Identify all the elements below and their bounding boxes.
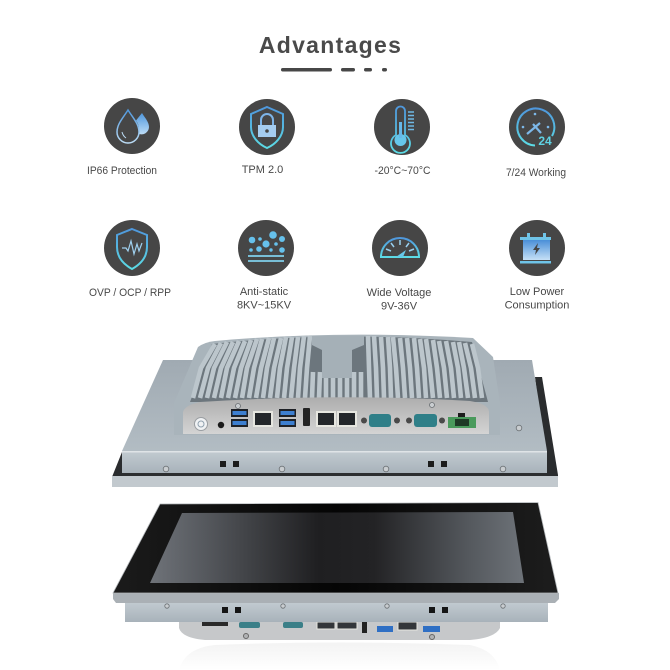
underside ports [202,622,440,640]
power terminal [448,413,476,428]
heatsink gaps [190,336,488,402]
serial ports [361,414,445,427]
icon: protection shield waveform [104,220,160,276]
side wall [122,451,547,473]
label: Wide Voltage: Wide Voltage [367,287,431,299]
power button [194,418,208,430]
heatsink fins [193,336,482,398]
audio jack [218,422,224,428]
label: Wide Voltage: 9V-36V [381,300,418,312]
product photo: rear view [112,335,558,487]
title underline [281,68,387,72]
heatsink centre plate [312,336,364,378]
icon: 24 hour clock: 24 [538,134,552,148]
icon: voltage gauge [372,220,428,276]
screws and vents [163,402,522,472]
rear plate [122,360,547,451]
I/O plate [183,397,489,434]
title: Advantages [259,32,402,58]
icon: thermometer [374,99,430,155]
label: OVP / OCP / RPP: OVP / OCP / RPP [89,287,171,299]
side wall [125,602,548,622]
label: 7/24 Working: 7/24 Working [506,167,566,179]
icon: battery [509,220,565,276]
icon: anti-static particles [238,220,294,276]
label: Low Power Consumption: Consumption [505,300,569,312]
display screen [150,512,524,583]
icon: 24 hour clock [509,99,565,155]
label: TPM 2.0: TPM 2.0 [242,164,283,176]
label: Anti-static: Anti-static [240,286,289,298]
black glass bezel [113,502,558,593]
heatsink housing [174,335,500,435]
label: IP66 Protection: IP66 Protection [87,165,157,177]
icon: TPM shield [239,99,295,155]
label: Anti-static: 8KV~15KV [237,300,292,312]
reflection [179,642,500,670]
label: Low Power Consumption: Low Power [510,286,565,298]
I/O plate underside [179,620,500,640]
USB ports [231,409,296,427]
front frame [113,593,559,603]
product photo: front view [113,502,559,670]
HDMI port [303,408,310,426]
panel frame and bezel [112,377,558,487]
LAN ports [253,411,357,427]
screws and vents [165,604,505,613]
icon: water drops [104,98,160,154]
label: temperature range: -20°C~70°C [374,165,431,177]
